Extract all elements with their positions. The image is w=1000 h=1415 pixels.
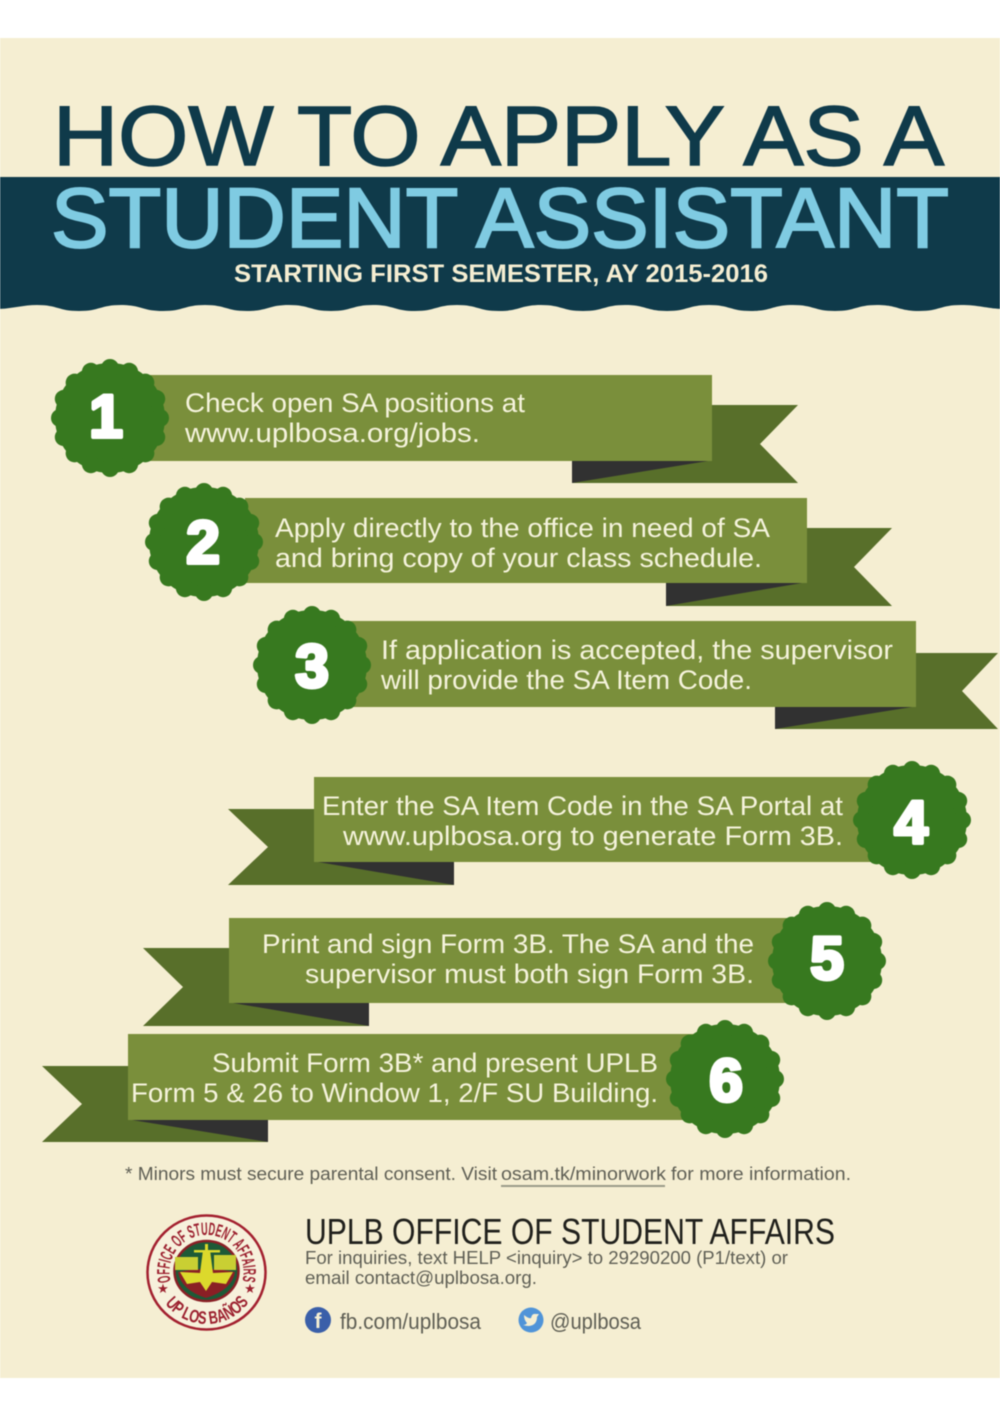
ribbon fold [132, 1120, 268, 1142]
number badge: 6 [709, 1047, 743, 1114]
step 1 [55, 363, 798, 483]
ribbon fold [572, 461, 708, 483]
ribbon fold [775, 707, 912, 729]
icon: twitter [518, 1308, 544, 1332]
number badge [670, 1024, 780, 1134]
ribbon body [245, 498, 807, 583]
seal: UPLB Office of Student Affairs: OFFICE OF STUDENT AFFAIRS [156, 1222, 257, 1284]
step text: supervisor must both sign Form 3B. [305, 959, 754, 989]
step text: and bring copy of your class schedule. [275, 543, 762, 573]
ribbon tail [42, 1066, 268, 1142]
ribbon fold [233, 1003, 369, 1026]
ribbon body [150, 375, 712, 461]
step 4 [228, 765, 967, 885]
ribbon tail [143, 948, 369, 1026]
step text: Apply directly to the office in need of SA [275, 513, 770, 543]
title line 2: STUDENT ASSISTANT [51, 171, 949, 265]
navy wavy banner [0, 177, 1000, 311]
ribbon body [229, 918, 799, 1003]
ribbon tail [666, 528, 892, 606]
ribbon tail [228, 809, 454, 885]
icon: facebook: f [314, 1310, 322, 1333]
step text: Check open SA positions at [185, 388, 526, 418]
step text: www.uplbosa.org/jobs. [184, 418, 480, 448]
number badge: 2 [186, 509, 220, 576]
step text: If application is accepted, the supervisor [381, 635, 893, 665]
facebook handle: fb.com/uplbosa [340, 1309, 482, 1334]
step text: Enter the SA Item Code in the SA Portal at [322, 791, 844, 821]
ribbon fold [666, 583, 802, 606]
inquiry text: For inquiries, text HELP <inquiry> to 29290200 (P1/text) or [305, 1248, 788, 1268]
number badge [55, 363, 165, 473]
seal: UPLB Office of Student Affairs: UP LOS BAÑOS [166, 1295, 248, 1325]
title line 1: HOW TO APPLY AS A [53, 89, 944, 183]
step 2 [149, 487, 892, 606]
footnote: osam.tk/minorwork [501, 1164, 667, 1184]
footnote: * Minors must secure parental consent. Visit [125, 1164, 497, 1184]
number badge [257, 610, 367, 720]
number badge: 4 [894, 789, 928, 856]
ribbon fold [318, 862, 454, 885]
ribbon tail [775, 653, 998, 729]
number badge: 1 [89, 383, 123, 450]
step 5 [143, 906, 882, 1026]
step 3 [257, 610, 998, 729]
ribbon body [350, 621, 916, 707]
step text: will provide the SA Item Code. [380, 665, 752, 695]
ribbon body [314, 777, 884, 862]
office name: UPLB OFFICE OF STUDENT AFFAIRS [305, 1211, 835, 1252]
number badge: 5 [810, 925, 844, 992]
seal: UPLB Office of Student Affairs: ★ [244, 1281, 256, 1296]
step 6 [42, 1024, 780, 1142]
footnote: for more information. [671, 1164, 851, 1184]
twitter handle: @uplbosa [550, 1309, 642, 1334]
ribbon body [128, 1034, 698, 1120]
seal: UPLB Office of Student Affairs: ★ [157, 1281, 169, 1296]
number badge [772, 906, 882, 1016]
number badge: 3 [295, 633, 329, 700]
subtitle: STARTING FIRST SEMESTER, AY 2015-2016 [234, 260, 768, 288]
number badge [857, 765, 967, 875]
footnote [125, 1164, 851, 1187]
step text: Form 5 & 26 to Window 1, 2/F SU Building. [131, 1078, 658, 1108]
step text: Print and sign Form 3B. The SA and the [262, 929, 754, 959]
inquiry text: email contact@uplbosa.org. [305, 1268, 537, 1288]
step text: Submit Form 3B* and present UPLB [212, 1048, 658, 1078]
ribbon tail [572, 405, 798, 483]
step text: www.uplbosa.org to generate Form 3B. [342, 821, 843, 851]
number badge [149, 487, 259, 597]
seal: UPLB Office of Student Affairs [146, 1214, 268, 1332]
icon: facebook [305, 1307, 331, 1333]
